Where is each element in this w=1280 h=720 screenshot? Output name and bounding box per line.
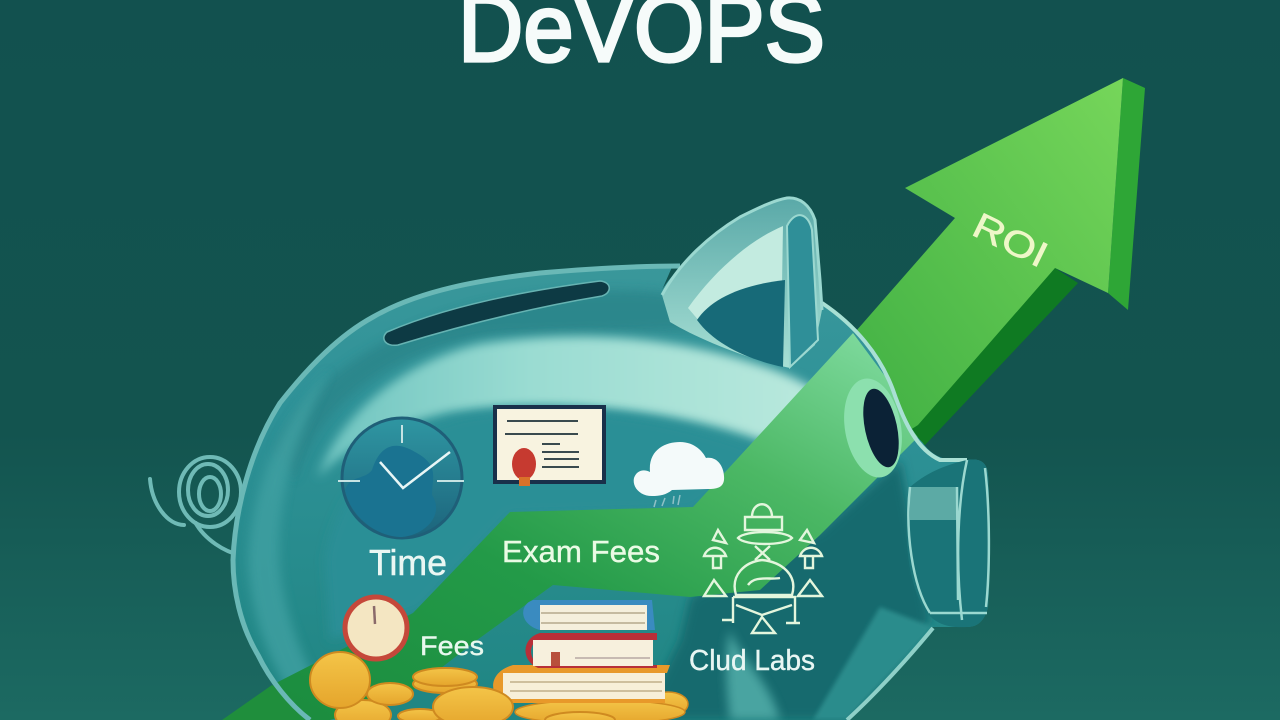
ear inner light xyxy=(688,226,783,322)
arrow tail bottom left xyxy=(222,685,330,720)
icon: gold coins xyxy=(310,652,615,720)
middle red book xyxy=(525,633,657,668)
icon: alarm clock xyxy=(345,597,407,659)
arrow shaft shadow side xyxy=(900,268,1078,445)
pig eye xyxy=(837,374,909,482)
ear inner dark xyxy=(697,280,785,367)
text: Cloud Labs: Clud Labs xyxy=(689,645,815,677)
icon: coins behind books xyxy=(515,692,688,720)
coin slot xyxy=(384,281,609,345)
icon: stack of books xyxy=(493,600,670,703)
pig body xyxy=(233,198,990,720)
top blue book xyxy=(523,600,655,630)
darker upper rim zone xyxy=(298,290,682,455)
ear fold xyxy=(787,215,818,367)
curly pig tail xyxy=(150,457,241,555)
bottom orange book xyxy=(493,665,670,703)
dark head lower zone xyxy=(640,460,930,720)
green band through pig xyxy=(222,333,925,720)
arrow head and shaft xyxy=(800,78,1123,500)
pig left and top outline xyxy=(233,266,680,720)
mid teal glow under highlight xyxy=(330,402,720,636)
ear rim xyxy=(662,198,822,310)
arrow head side face xyxy=(1108,78,1145,310)
icon: cloud xyxy=(634,442,724,507)
text: Exam Fees: Exam Fees xyxy=(502,534,660,569)
head outline xyxy=(822,303,967,460)
icon: clock xyxy=(338,418,464,538)
icon: cloud labs network xyxy=(704,504,822,633)
left sheen xyxy=(248,389,335,720)
text: Time: Time xyxy=(369,542,447,583)
jaw outline xyxy=(847,628,933,720)
pig snout xyxy=(906,460,990,627)
ROI label: ROI xyxy=(966,204,1055,275)
body highlight xyxy=(318,337,850,478)
pig ear xyxy=(662,198,822,368)
text: Fees: Fees xyxy=(420,631,484,661)
lower right glass fold xyxy=(726,630,780,720)
jaw glass band xyxy=(813,607,933,720)
icon: certificate xyxy=(493,405,606,486)
piggy bank xyxy=(222,198,990,720)
arrow outside pig xyxy=(222,78,1145,720)
certificate seal xyxy=(512,448,536,480)
